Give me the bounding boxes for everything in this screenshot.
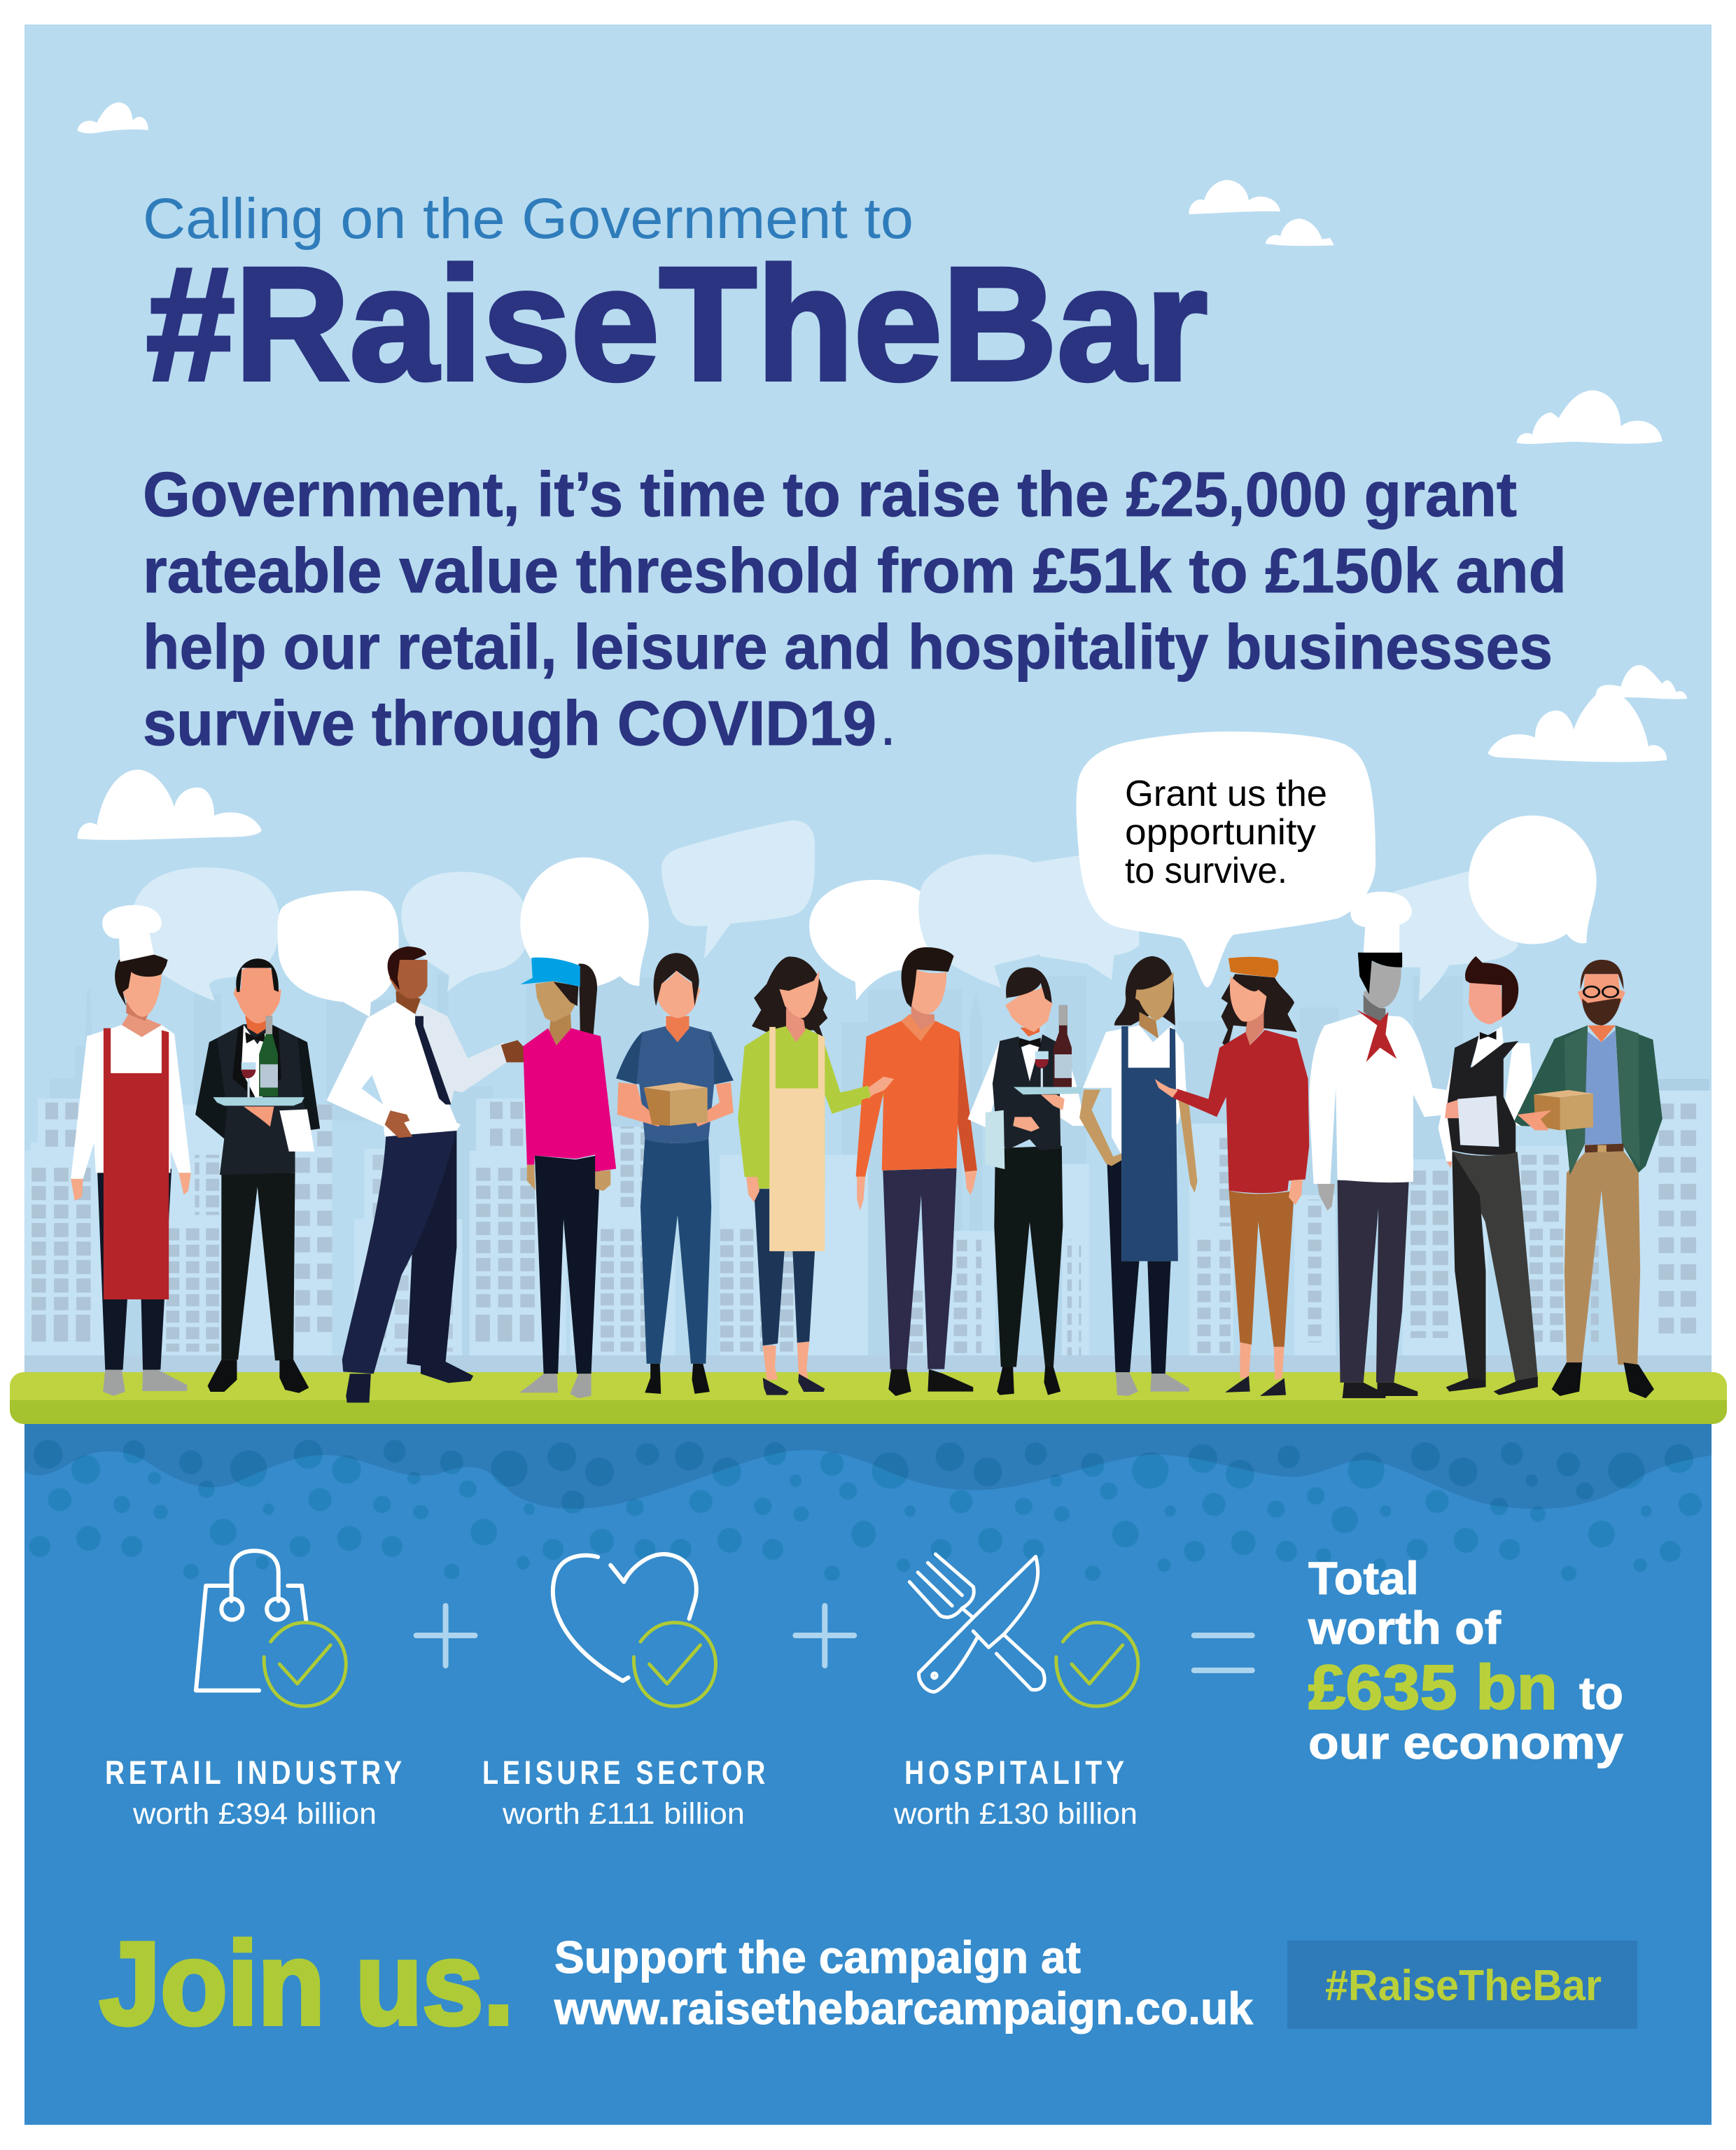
main message text: Government, it’s time to raise the £25,000 grant <box>143 460 1517 530</box>
panel: sky background <box>24 25 1712 1425</box>
people group right <box>851 892 1662 1398</box>
title: #RaiseTheBar <box>146 234 1208 414</box>
main message text: survive through COVID19 <box>143 689 876 759</box>
label: hospitality <box>893 1754 1138 1831</box>
label: hospitality: worth £130 billion <box>893 1797 1138 1831</box>
label: leisure sector <box>482 1754 769 1831</box>
water bubbles band right <box>868 1424 1712 1581</box>
label: leisure sector: worth £111 billion <box>502 1797 745 1831</box>
callout: total worth: our economy <box>1308 1717 1623 1768</box>
callout: total worth <box>1308 1552 1623 1768</box>
icon: shopping bag with tick <box>196 1551 346 1706</box>
speech bubble: grant us <box>1077 732 1376 987</box>
icon: heart with tick <box>553 1554 716 1706</box>
figure: woman in blue uniform holding box <box>616 953 734 1394</box>
figure: woman in blue apron <box>1079 956 1198 1396</box>
support text: www.raisethebarcampaign.co.uk <box>554 1983 1254 2034</box>
speech bubble text: to survive. <box>1125 851 1287 891</box>
speech bubbles right <box>918 732 1597 1002</box>
join us heading: Join us. <box>99 1918 514 2049</box>
icon: plus sign two <box>795 1606 854 1666</box>
icon: fork and knife with tick <box>909 1554 1138 1706</box>
figure: waiter in black waistcoat <box>1438 956 1538 1395</box>
people group left <box>71 905 891 1403</box>
speech bubbles left <box>132 821 941 1017</box>
label: leisure sector: LEISURE SECTOR <box>482 1754 769 1791</box>
figure: man in orange jumper <box>851 947 977 1396</box>
hashtag box <box>1287 1941 1637 2029</box>
figure: bearded man in green blazer with box <box>1514 960 1662 1398</box>
label: retail industry <box>105 1754 406 1831</box>
main message text: . <box>879 689 897 759</box>
city skyline left <box>24 974 868 1372</box>
city skyline right <box>868 976 1712 1374</box>
label: retail industry: RETAIL INDUSTRY <box>105 1754 406 1791</box>
figure: woman in pink with blue cap <box>519 958 616 1398</box>
label: retail industry: worth £394 billion <box>132 1797 377 1831</box>
main message text <box>143 460 1567 759</box>
figure: waitress with wine tray <box>967 968 1084 1395</box>
support text: Support the campaign at <box>554 1932 1081 1983</box>
speech bubble text: opportunity <box>1125 812 1316 853</box>
icon: plus sign one <box>416 1606 475 1666</box>
figure: businessman in white shirt <box>327 947 531 1403</box>
label: hospitality: HOSPITALITY <box>904 1754 1128 1791</box>
clouds <box>78 102 1687 840</box>
callout: total worth: to <box>1579 1667 1623 1719</box>
callout: total worth: £635 bn <box>1308 1653 1558 1723</box>
panel: blue economy section <box>24 1421 1712 2125</box>
speech bubble text <box>1125 774 1327 891</box>
main message text: help our retail, leisure and hospitality businesses <box>143 613 1553 683</box>
icon: equals sign <box>1194 1635 1252 1670</box>
speech bubble text: Grant us the <box>1125 774 1327 814</box>
figure: chef with red neckerchief <box>1310 892 1446 1398</box>
hashtag box: #RaiseTheBar <box>1325 1962 1602 2010</box>
figure: waiter in tuxedo with wine <box>195 958 320 1393</box>
subtitle: Calling on the Government to <box>143 187 913 251</box>
callout: total worth: Total <box>1308 1552 1419 1604</box>
water bubbles band left <box>24 1424 876 1581</box>
figure: woman in red jumper with orange hat <box>1155 957 1309 1396</box>
figure: chef with red apron <box>71 905 191 1396</box>
support text <box>554 1932 1254 2034</box>
main message text: rateable value threshold from £51k to £150k and <box>143 536 1567 606</box>
figure: woman in green with cream apron <box>738 956 891 1395</box>
grass ground platform <box>10 1372 1727 1424</box>
callout: total worth: worth of <box>1308 1602 1502 1654</box>
